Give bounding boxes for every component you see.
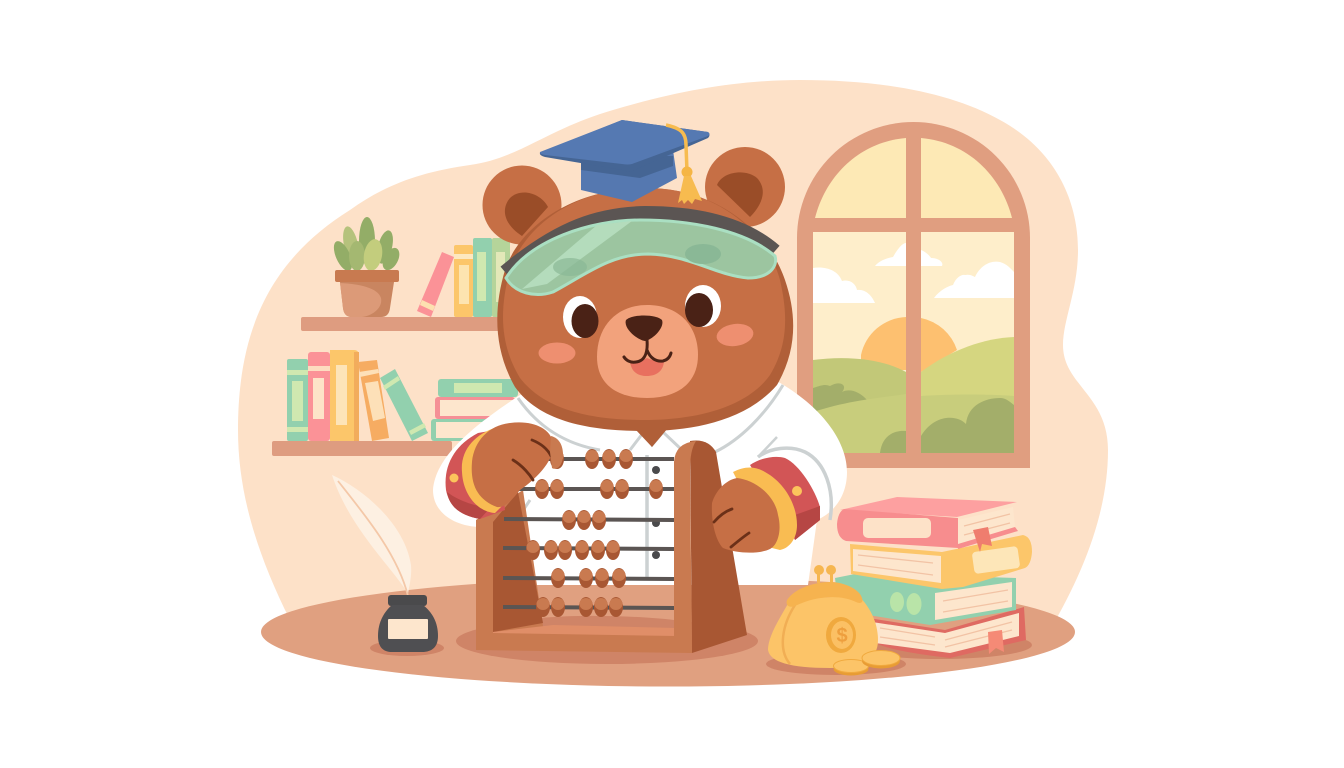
bottom book bookmark	[988, 630, 1004, 654]
visor reflection right	[685, 244, 721, 264]
bear ear left	[482, 166, 562, 244]
pink book label	[863, 518, 931, 538]
coat details	[518, 385, 831, 577]
cap base	[581, 150, 677, 202]
left paw finger lines	[513, 440, 551, 480]
chin tip	[634, 428, 668, 447]
mouth	[624, 340, 671, 362]
ink shadow	[370, 640, 444, 656]
inner ear left	[505, 192, 548, 236]
plant leaves	[330, 217, 403, 273]
tassel cord	[666, 125, 687, 172]
green book page lines	[943, 590, 1008, 612]
quill vein	[338, 481, 408, 596]
purse shadow	[766, 653, 906, 675]
stacked books behind bear	[431, 379, 518, 441]
right cuff dark	[795, 506, 820, 540]
cap board	[540, 120, 710, 171]
coin purse	[768, 565, 900, 676]
bear ear right	[705, 147, 785, 227]
right paw	[712, 478, 780, 553]
purse crease	[783, 605, 795, 664]
left eye	[563, 296, 598, 338]
abacus beads	[526, 449, 663, 617]
pink book pages	[958, 507, 1015, 544]
yellow book	[850, 535, 1032, 589]
table	[261, 578, 1075, 686]
abacus rods	[503, 459, 674, 608]
yellow book pages	[853, 549, 941, 583]
abacus	[476, 440, 747, 653]
tassel knob	[682, 166, 692, 178]
top pink book	[837, 497, 1018, 552]
abacus right post front	[674, 441, 696, 653]
green book	[835, 573, 1016, 625]
right arm: cuff and paw	[712, 457, 820, 553]
green visor	[506, 220, 776, 294]
abacus left post inner	[493, 492, 543, 632]
book stack	[835, 497, 1032, 658]
potted plant	[330, 217, 403, 317]
graduation cap	[540, 120, 710, 204]
muzzle	[597, 305, 698, 398]
window: upper right pane	[921, 138, 1012, 218]
left arm: cuff and paw	[446, 422, 563, 519]
left cuff yellow	[462, 427, 502, 513]
left paw	[472, 422, 553, 507]
purse flap	[787, 582, 863, 607]
ink bottle neck	[388, 595, 427, 606]
upper shelf	[301, 317, 506, 331]
lower shelf	[272, 441, 452, 456]
abacus right post side	[690, 440, 747, 653]
left cheek	[538, 342, 576, 364]
abacus base top	[493, 625, 676, 637]
quill feather	[332, 475, 411, 594]
gold coin right	[862, 650, 900, 668]
bottom book page lines	[880, 622, 1012, 647]
pink book bottom rim	[958, 527, 1018, 549]
right cuff dot	[792, 486, 802, 496]
ink bottle label	[388, 619, 428, 639]
right eye	[685, 285, 721, 327]
inner ear right	[717, 172, 763, 217]
green book pages	[935, 582, 1012, 620]
visor reflection left	[553, 258, 587, 276]
window: upper left pane	[815, 138, 906, 218]
visor glare	[522, 221, 632, 289]
abacus shadow	[456, 618, 758, 664]
left cuff red	[446, 430, 505, 519]
plant pot rim	[335, 270, 399, 282]
window: lower left scene	[813, 232, 906, 453]
tongue	[630, 358, 664, 376]
purse clasp balls	[814, 565, 836, 583]
bottom red book	[868, 607, 1026, 658]
ink bottle and quill	[332, 475, 444, 656]
visor strap	[505, 213, 775, 272]
abacus bead highlights	[526, 450, 662, 610]
abacus left post front	[476, 490, 545, 650]
right cheek	[715, 322, 755, 348]
pink book bookmark	[973, 527, 992, 552]
right paw finger lines	[714, 509, 749, 547]
gold coin left	[834, 660, 868, 676]
ink bottle body	[378, 605, 438, 652]
window: lower right scene	[921, 232, 1014, 453]
pink book page lines	[964, 514, 1010, 535]
white coat body	[433, 380, 847, 585]
purse body	[768, 595, 878, 668]
plant pot highlight	[340, 283, 381, 317]
tassel	[678, 176, 702, 204]
right cuff yellow	[733, 468, 797, 550]
background blob	[238, 80, 1108, 630]
bear head	[497, 172, 793, 447]
left cuff dark	[447, 492, 490, 519]
plant pot	[340, 282, 394, 317]
books on upper shelf	[417, 238, 510, 317]
right cuff red	[750, 457, 820, 540]
abacus back shade	[540, 616, 674, 630]
cap shade	[581, 156, 673, 178]
coat buttons	[652, 466, 660, 559]
left cuff dot	[450, 474, 458, 482]
window	[797, 122, 1030, 468]
yellow book page lines	[858, 555, 933, 575]
dollar sign: $	[836, 625, 848, 647]
green book dot 2	[906, 593, 922, 615]
books on lower shelf	[287, 350, 428, 441]
left paw thumb	[550, 436, 563, 469]
yellow book label	[972, 546, 1020, 574]
nose	[626, 316, 662, 341]
book stack shadow	[848, 631, 1032, 659]
green book dots	[890, 592, 904, 612]
abacus base front	[476, 633, 692, 653]
